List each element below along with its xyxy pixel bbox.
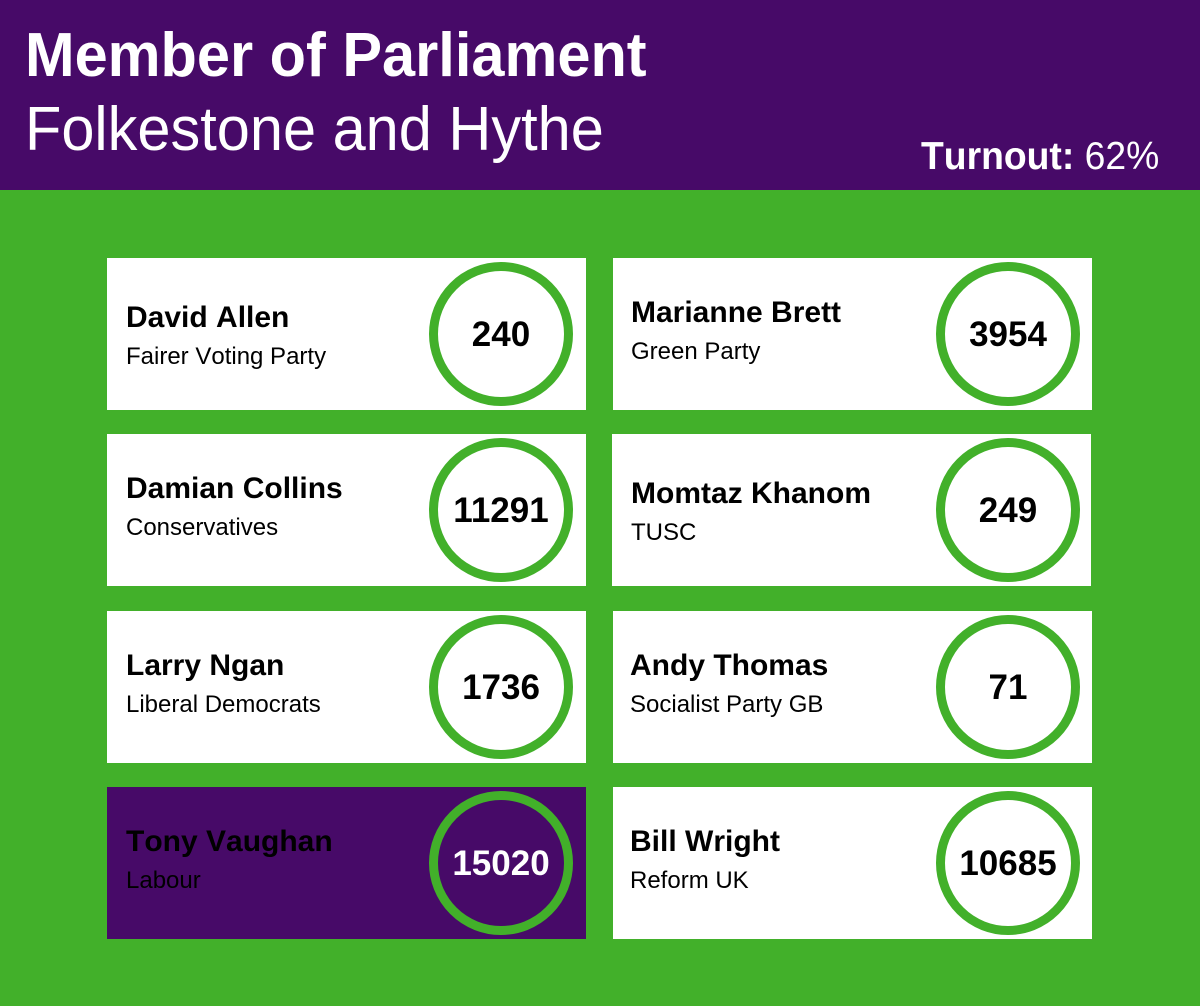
card: Andy Thomas [613, 611, 1092, 763]
votes [429, 615, 573, 759]
votes: 71 [989, 668, 1027, 707]
votes [936, 438, 1080, 582]
name: David Allen [126, 301, 289, 334]
card: Momtaz Khanom [612, 434, 1091, 586]
votes: 1736 [462, 668, 540, 707]
votes: 249 [979, 491, 1037, 530]
votes: 11291 [453, 491, 549, 530]
turnout: Turnout: 62% [921, 134, 1159, 177]
party: Fairer Voting Party [126, 343, 326, 370]
party: Socialist Party GB [630, 691, 823, 718]
card: Damian Collins [107, 434, 586, 586]
party: TUSC [631, 519, 696, 546]
card: Marianne Brett [613, 258, 1092, 410]
name: Momtaz Khanom [631, 477, 871, 510]
votes: 3954 [969, 315, 1047, 354]
name: Tony Vaughan [126, 825, 333, 858]
party: Reform UK [630, 867, 749, 894]
title: Member of Parliament [25, 20, 647, 90]
card: Tony Vaughan (winner) [107, 787, 586, 939]
votes: 15020 [452, 844, 550, 883]
party: Labour [126, 867, 201, 894]
header band [0, 0, 1200, 190]
votes [936, 791, 1080, 935]
name: Andy Thomas [630, 649, 828, 682]
votes: 10685 [959, 844, 1057, 883]
card: Bill Wright [613, 787, 1092, 939]
card: Larry Ngan [107, 611, 586, 763]
card: David Allen [107, 258, 586, 410]
votes [429, 791, 573, 935]
name: Marianne Brett [631, 296, 841, 329]
votes [936, 262, 1080, 406]
name: Bill Wright [630, 825, 780, 858]
name: Larry Ngan [126, 649, 284, 682]
name: Damian Collins [126, 472, 343, 505]
party: Conservatives [126, 514, 278, 541]
votes [936, 615, 1080, 759]
votes [429, 438, 573, 582]
party: Green Party [631, 338, 760, 365]
party: Liberal Democrats [126, 691, 321, 718]
votes [429, 262, 573, 406]
votes: 240 [472, 315, 530, 354]
subtitle: Folkestone and Hythe [25, 94, 604, 164]
